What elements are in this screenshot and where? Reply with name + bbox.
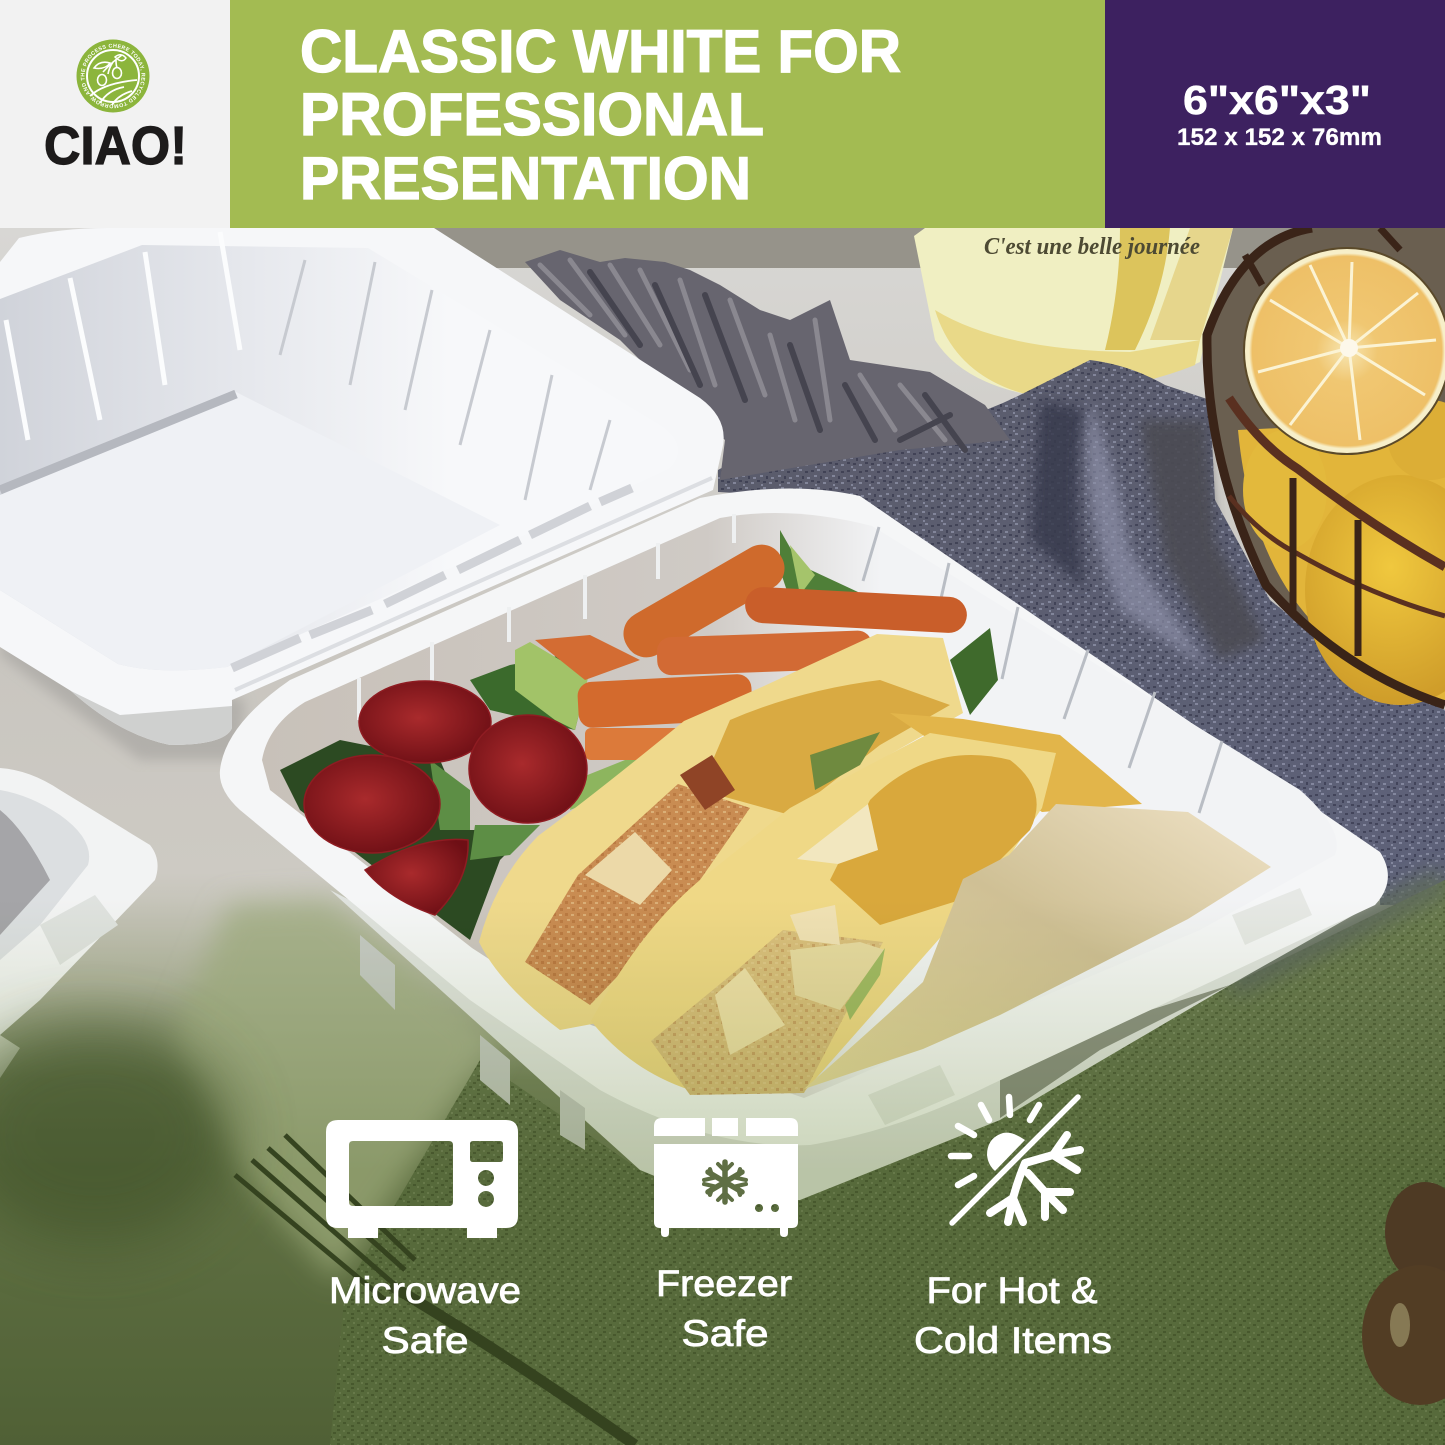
photo: blanket fringe bbox=[525, 250, 1010, 480]
logo: circular emblem bbox=[76, 40, 150, 112]
icon: sun and snowflake bbox=[951, 1097, 1080, 1223]
photo: container rim bbox=[220, 488, 1388, 1145]
photo: fork bbox=[235, 1135, 635, 1445]
photo: container inner tray bbox=[262, 513, 1337, 1098]
size in millimetres: 152 x 152 x 76mm bbox=[1177, 124, 1382, 151]
label: Microwave bbox=[329, 1270, 521, 1311]
feature: microwave safe bbox=[326, 1120, 521, 1361]
title: PRESENTATION bbox=[300, 145, 751, 212]
icon: microwave bbox=[326, 1120, 518, 1238]
header: logo panel bbox=[0, 0, 230, 228]
photo: drink glass: C'est une belle journée bbox=[984, 234, 1200, 260]
photo: second container at left bbox=[0, 768, 158, 1078]
photo: shadow under lid bbox=[0, 640, 245, 760]
feature: freezer safe bbox=[654, 1118, 798, 1354]
taco three bbox=[804, 804, 1271, 1089]
photo: salad greens bbox=[280, 530, 998, 940]
label: Safe bbox=[382, 1320, 468, 1361]
size in inches: 6"x6"x3" bbox=[1183, 77, 1371, 123]
photo: grey knit blanket bbox=[718, 360, 1445, 905]
label: Safe bbox=[682, 1313, 768, 1354]
photo: olives at lower right bbox=[1362, 1182, 1445, 1405]
photo: wire basket with lemons bbox=[1205, 228, 1445, 705]
taco two back bbox=[890, 713, 1142, 812]
label: Cold Items bbox=[914, 1320, 1112, 1361]
photo: folded pita tacos bbox=[479, 634, 1271, 1095]
label bbox=[914, 1270, 1112, 1361]
title bbox=[300, 18, 901, 212]
header: title panel bbox=[230, 0, 1105, 228]
photo: green colour tint bbox=[0, 900, 1445, 1445]
photo: green towel bbox=[330, 880, 1445, 1445]
photo: lemon slice bbox=[1244, 248, 1445, 454]
header: size panel bbox=[1105, 0, 1445, 228]
label: For Hot & bbox=[926, 1270, 1098, 1311]
taco two front bbox=[591, 733, 1056, 1092]
photo: carrots bbox=[535, 537, 968, 760]
logo: wordmark: CIAO! bbox=[44, 116, 187, 176]
photo: open container lid bbox=[0, 228, 724, 745]
photo: pale cloth left of container bbox=[170, 900, 500, 1280]
photo: container base body bbox=[220, 488, 1388, 1201]
title: PROFESSIONAL bbox=[300, 81, 764, 148]
icon: freezer bbox=[654, 1118, 798, 1237]
title: CLASSIC WHITE FOR bbox=[300, 18, 901, 85]
photo: drink glass bbox=[914, 228, 1233, 394]
label bbox=[329, 1270, 521, 1361]
photo: darker left shadow bbox=[0, 1025, 235, 1245]
label bbox=[656, 1263, 792, 1354]
label: Freezer bbox=[656, 1263, 792, 1304]
photo: cherry tomatoes bbox=[304, 681, 587, 915]
feature: for hot and cold items bbox=[914, 1097, 1112, 1361]
